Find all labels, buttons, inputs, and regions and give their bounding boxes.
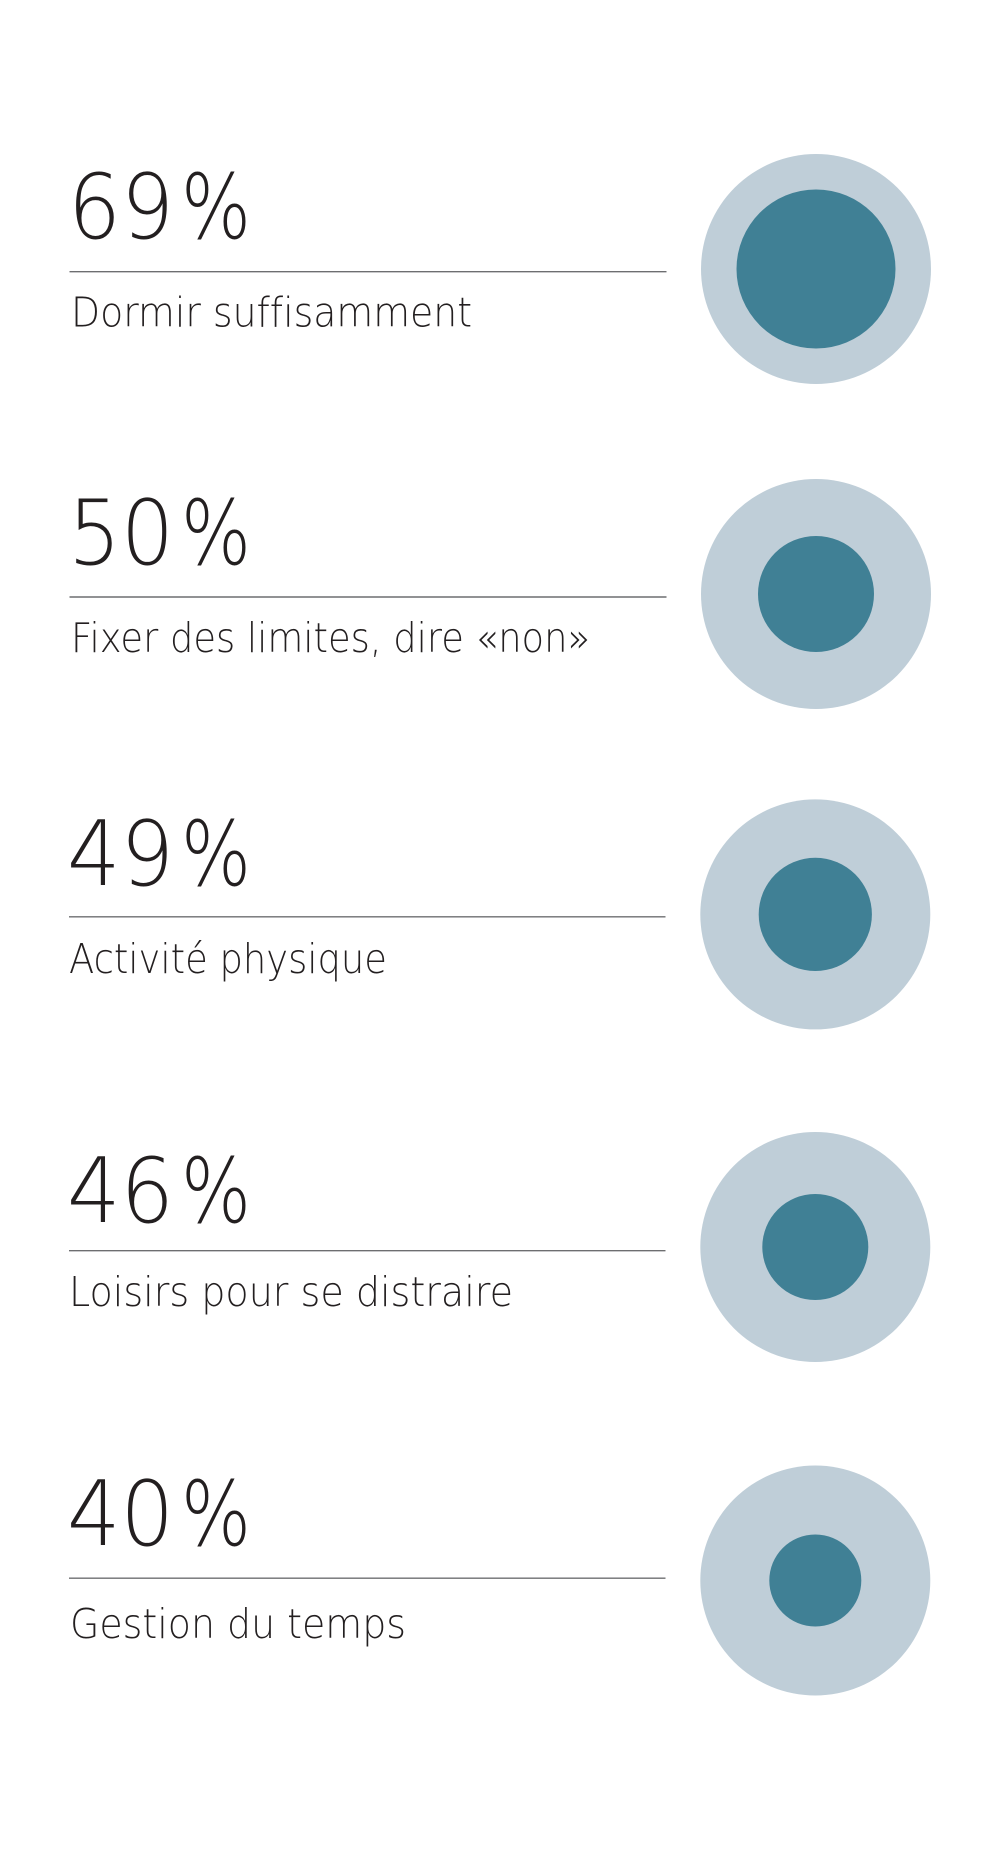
value: 49 %: % — [181, 802, 251, 907]
value: 40 % — [67, 1462, 251, 1567]
circle: 50 % — [701, 479, 931, 709]
value: 40 %: % — [181, 1462, 251, 1567]
row: 46 % Loisirs pour se distraire — [67, 1132, 930, 1362]
circle: 46 % — [700, 1132, 930, 1362]
row: 50 % Fixer des limites — [68, 479, 931, 709]
value: 50 %: % — [181, 481, 251, 586]
value: 69 %: % — [181, 155, 251, 260]
label: Fixer des limites, dire «non»: Fixer des limites, dire «non» — [71, 614, 590, 662]
label: Activité physique: Activité physique — [69, 935, 387, 983]
label: Loisirs pour se distraire: Loisirs pour se distraire — [69, 1268, 513, 1316]
label: Dormir suffisamment: Dormir suffisamment — [71, 288, 472, 336]
circle: 49 % — [700, 799, 930, 1029]
label: Gestion du temps: Gestion du temps — [70, 1600, 406, 1648]
value: 50 %: 50 — [68, 481, 174, 586]
row: 40 % Gestion du temps — [67, 1462, 930, 1696]
value: 69 % — [68, 155, 251, 260]
value: 49 % — [67, 802, 251, 907]
value: 46 %: % — [181, 1139, 251, 1244]
value: 49 %: 49 — [67, 802, 174, 907]
value: 50 % — [68, 481, 251, 586]
value: 46 % — [67, 1139, 251, 1244]
circle: 69 % — [701, 154, 931, 384]
circle: 40 % — [700, 1466, 930, 1696]
row: 49 % Activité physique — [67, 799, 930, 1029]
value: 40 %: 40 — [67, 1462, 174, 1567]
value: 46 %: 46 — [67, 1139, 174, 1244]
row: 69 % Dormir suffisamment — [68, 154, 931, 384]
value: 69 %: 69 — [68, 155, 174, 260]
